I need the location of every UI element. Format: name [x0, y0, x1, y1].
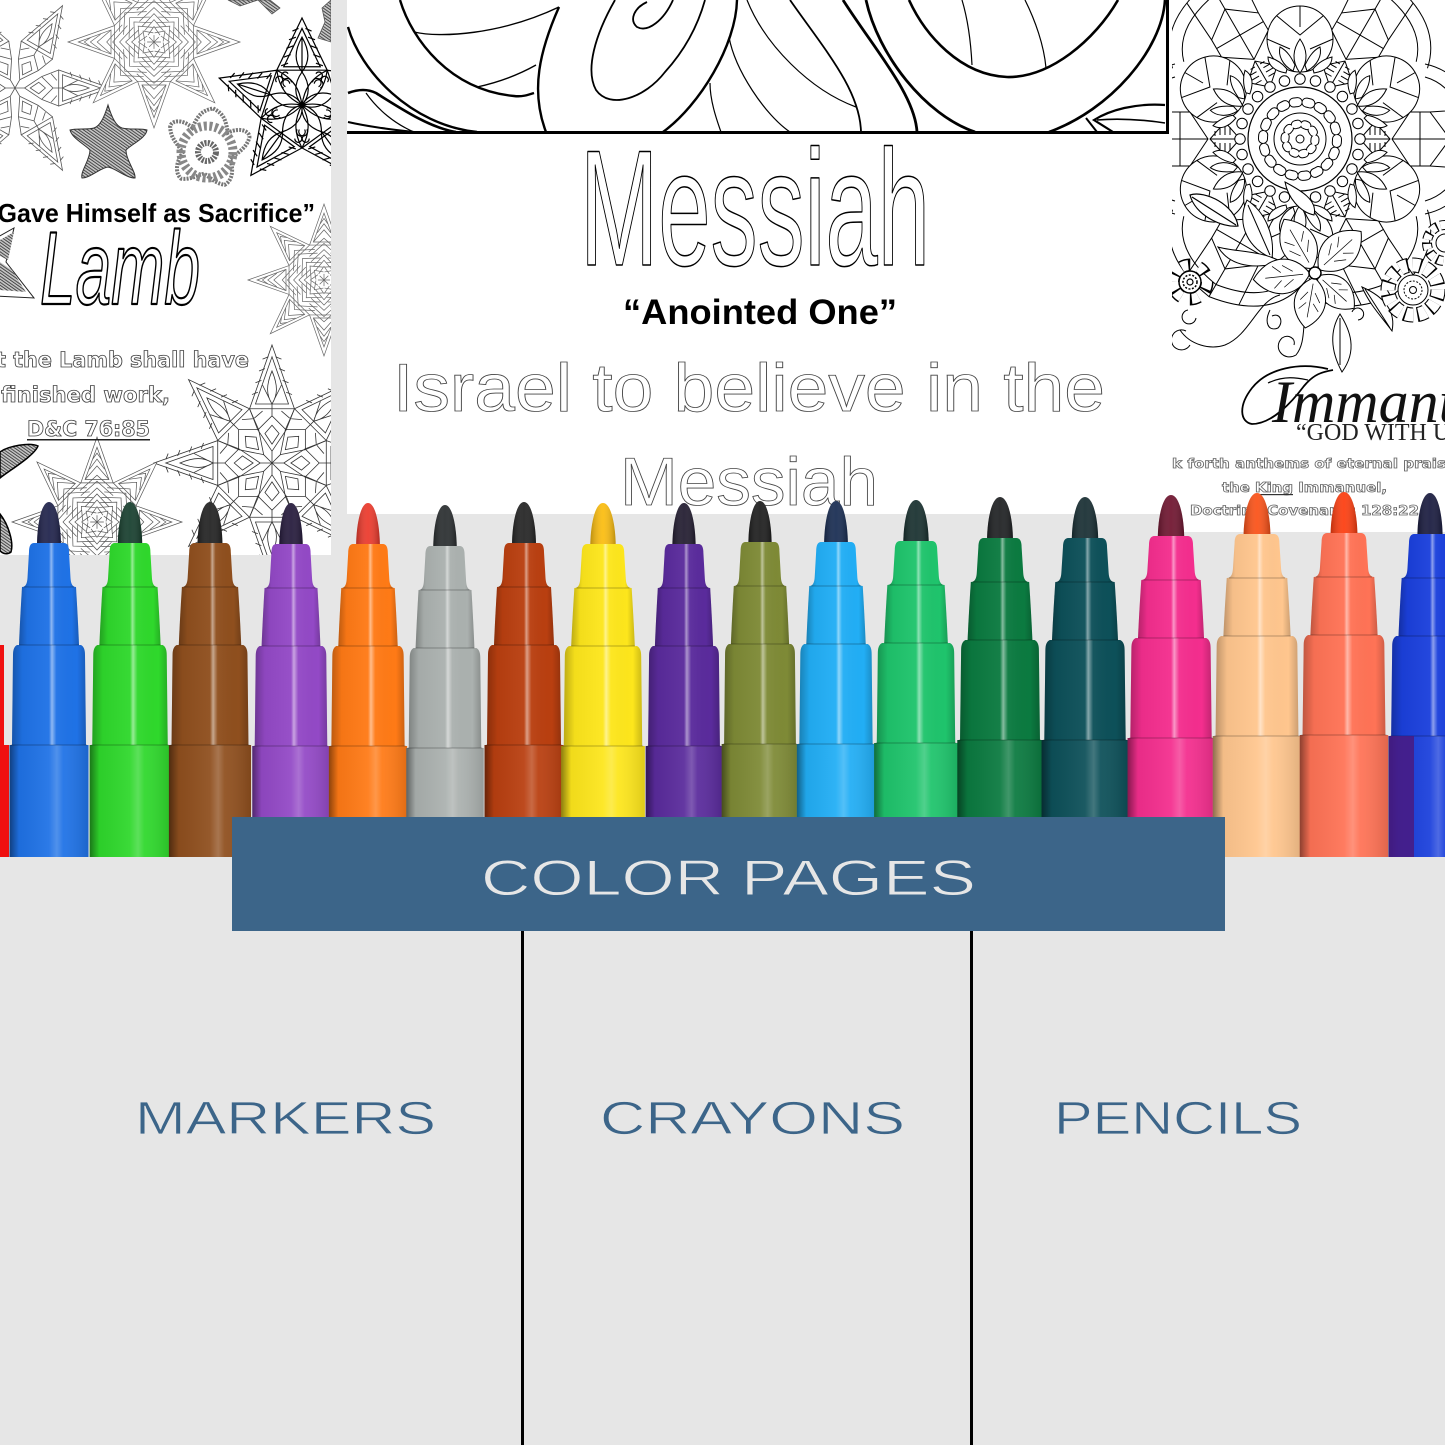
- title: Lamb: Lamb: [40, 211, 200, 327]
- panel: Messiah coloring page: [347, 0, 1173, 520]
- floral line art: [348, 0, 1165, 132]
- verse text: Doctrine Covenants 128:22: [1190, 504, 1419, 519]
- marker: brown: [169, 502, 251, 870]
- marker: rust: [484, 502, 564, 817]
- marker row: [0, 492, 1445, 873]
- panel: Immanuel coloring page: [1172, 0, 1445, 532]
- divider: [521, 931, 524, 1445]
- marker: dark green: [957, 497, 1042, 817]
- heading banner: Color Pages: COLOR: [481, 850, 724, 906]
- marker: yellow: [561, 503, 645, 817]
- verse text: t the Lamb shall have: [0, 348, 249, 372]
- marker: gray: [406, 505, 484, 817]
- body text: [393, 350, 1105, 520]
- title: Messiah: Messiah: [580, 116, 930, 300]
- column: Crayons: CRAYONS: [600, 1092, 905, 1144]
- marker: olive: [722, 501, 797, 817]
- marker: pink: [1128, 495, 1213, 817]
- marker: sky blue: [796, 501, 874, 817]
- marker: green: [90, 502, 170, 870]
- marker: red (partial): [0, 645, 9, 857]
- marker: emerald: [874, 500, 958, 817]
- heading banner: Color Pages: [232, 817, 1225, 931]
- heading banner: Color Pages: PAGES: [741, 850, 976, 906]
- body text: Messiah: [620, 444, 878, 520]
- marker: indigo: [1389, 493, 1445, 861]
- divider: [970, 931, 973, 1445]
- column: Pencils: PENCILS: [1054, 1092, 1302, 1144]
- subtitle: Anointed One: “Anointed One”: [623, 293, 897, 332]
- marker: orange: [328, 503, 408, 817]
- verse text: D&C 76:85: [27, 417, 150, 441]
- marker: coral: [1300, 492, 1388, 860]
- star artwork: [0, 0, 331, 555]
- marker: blue: [10, 502, 88, 870]
- artwork frame: [347, 0, 1168, 132]
- marker: peach: [1213, 493, 1301, 861]
- body text: Israel to believe in the: [393, 350, 1105, 426]
- marker: violet: [646, 503, 722, 817]
- panel: Lamb coloring page: [0, 0, 331, 555]
- verse text: the King Immanuel,: [1222, 481, 1387, 496]
- verse text: [1172, 457, 1445, 519]
- verse text: finished work,: [1, 383, 170, 407]
- marker: teal: [1042, 497, 1128, 817]
- column: Markers: MARKERS: [135, 1092, 436, 1144]
- mandala artwork: [1172, 0, 1445, 373]
- verse text: k forth anthems of eternal prais: [1172, 457, 1445, 472]
- verse text: [0, 348, 249, 441]
- marker: purple: [252, 503, 329, 817]
